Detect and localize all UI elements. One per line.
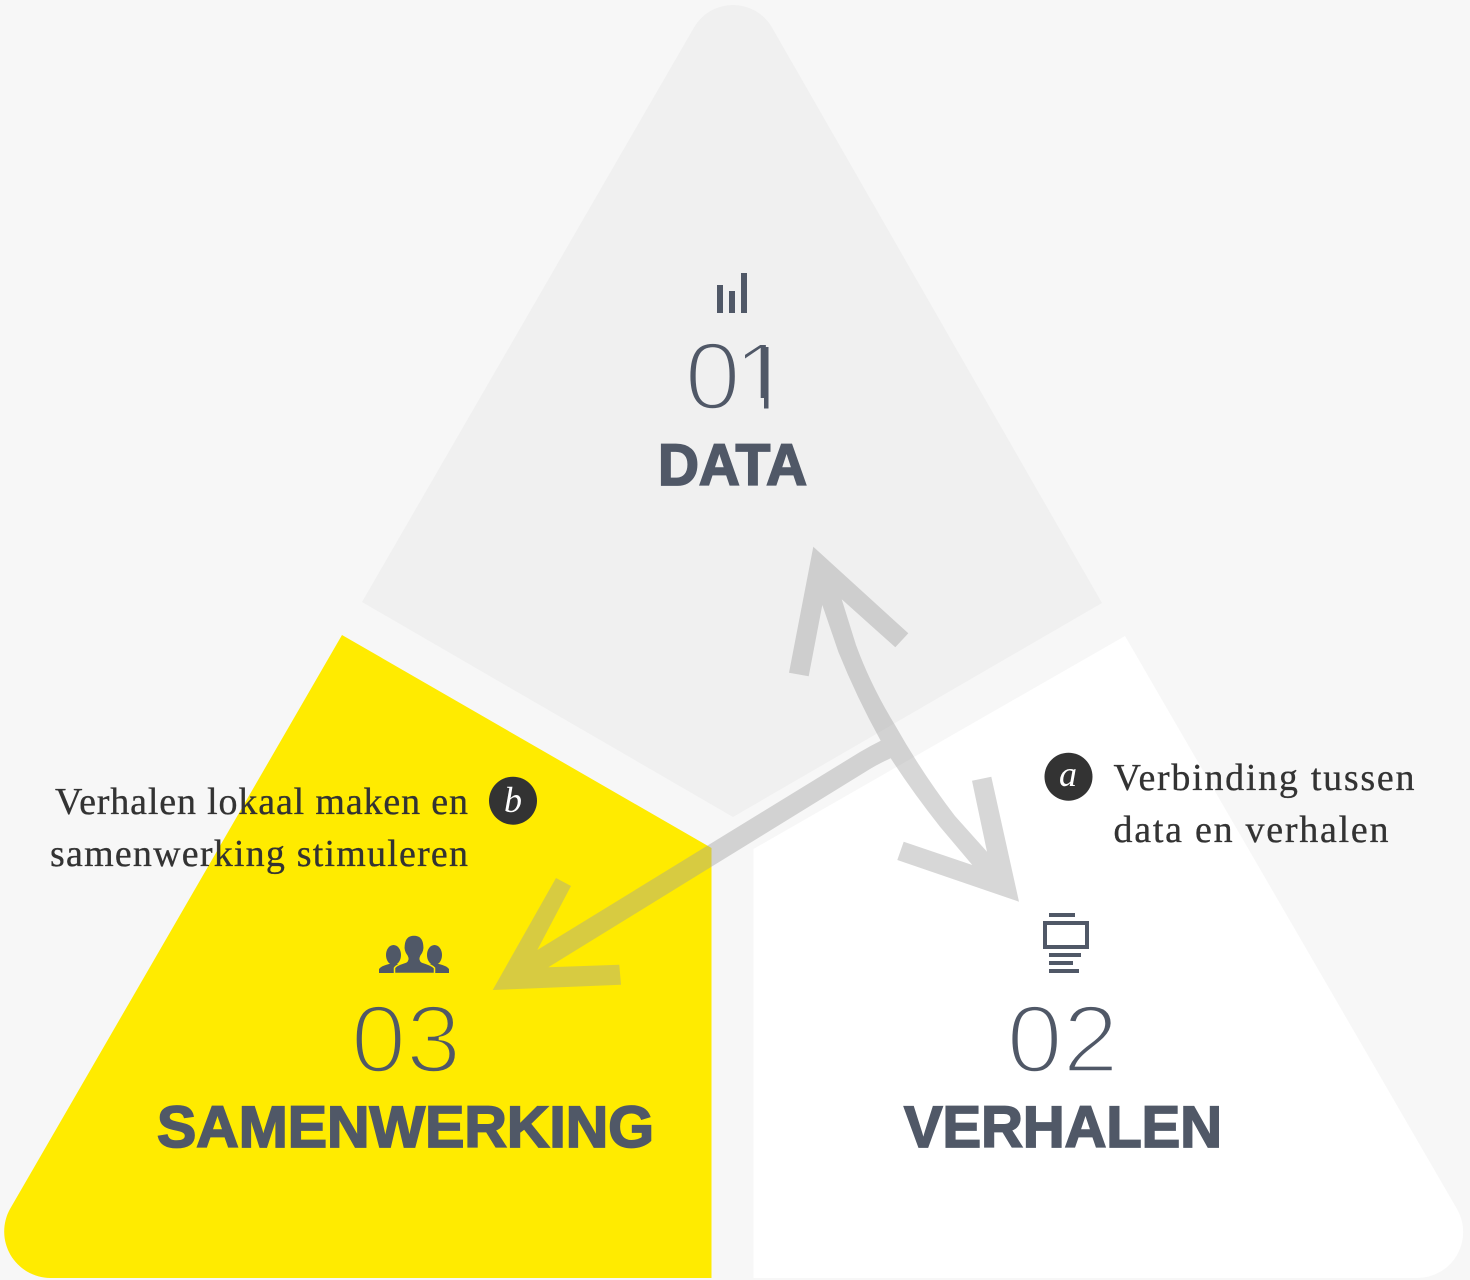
heading: data: DATA (658, 433, 807, 498)
panel: samenwerking (4, 635, 712, 1278)
number 01 (685, 323, 790, 430)
panel: data triangle (362, 5, 1102, 817)
number 03: 03 (351, 986, 461, 1093)
callout a: connection between data and stories: data en verhalen (1114, 809, 1388, 851)
arrows: connections between the three segments (493, 547, 1019, 990)
panel: verhalen (754, 636, 1463, 1278)
icon: screen with text lines (1043, 913, 1089, 973)
number 02: 02 (1007, 986, 1119, 1093)
icon: three people (379, 935, 449, 974)
callout b: make stories local and stimulate collaboration: Verhalen lokaal maken en (55, 781, 468, 823)
icon: bar chart (717, 273, 747, 313)
callout b: make stories local and stimulate collaboration: samenwerking stimuleren (50, 833, 468, 875)
callout a: connection between data and stories: Verbinding tussen (1114, 757, 1414, 799)
number 01: 0 (685, 323, 741, 430)
callout b: make stories local and stimulate collaboration (50, 777, 537, 875)
callout b: make stories local and stimulate collaboration: b (504, 780, 522, 820)
callout a: connection between data and stories: a (1059, 754, 1077, 794)
callout a: connection between data and stories (1044, 753, 1414, 851)
number 01: 1 (734, 323, 790, 430)
heading: samenwerking: SAMENWERKING (157, 1095, 654, 1160)
heading: verhalen: VERHALEN (904, 1095, 1222, 1160)
